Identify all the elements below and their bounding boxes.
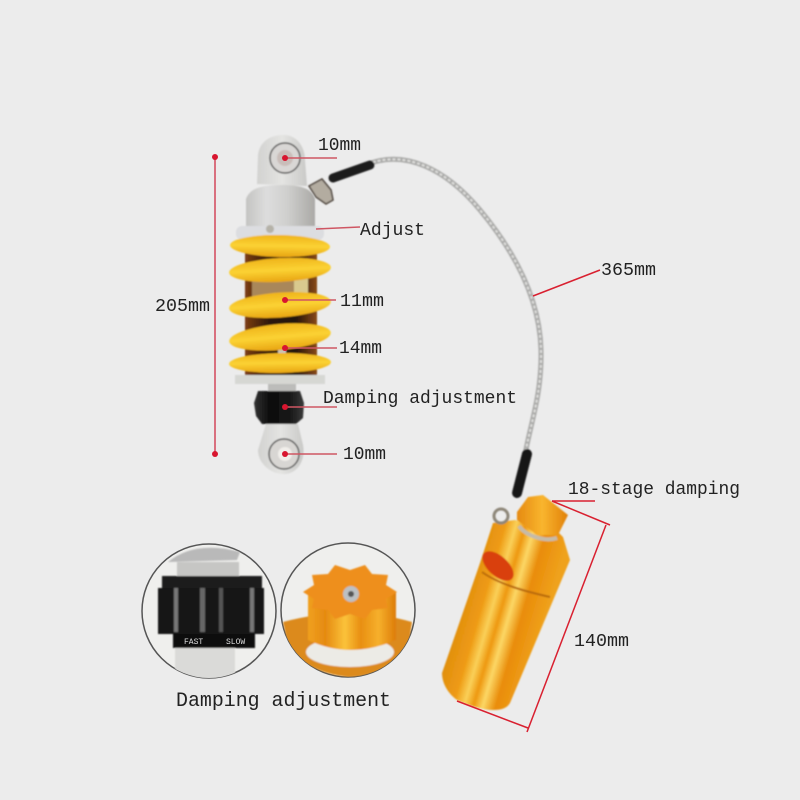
spring coils [228,234,332,374]
labels: 10mm [343,445,386,465]
reservoir hose [309,159,541,493]
canister ring [494,509,508,523]
bottom eye [269,439,299,469]
black damping knob [254,391,304,424]
hose lower sleeve [517,454,527,493]
top mount [257,135,307,186]
knob detail: gold adjuster cap [281,543,415,677]
shock absorber [228,135,332,474]
neck ring [519,526,557,539]
knob detail: black damping adjuster: SLOW [226,638,245,647]
labels: 11mm [340,292,384,312]
labels: 205mm [155,297,210,317]
labels: 14mm [339,339,382,359]
leader dots [282,155,288,457]
labels: 140mm [574,632,629,652]
inner shaft [245,250,317,375]
canister groove [482,572,550,597]
labels: 10mm [318,136,361,156]
labels [155,136,740,713]
dimension line: overall height [212,154,218,457]
knob detail: black damping adjuster [142,544,276,680]
labels: 18-stage damping [568,480,740,500]
canister cap [517,495,568,535]
labels: 365mm [601,261,656,281]
knob scale text: FAST [184,638,203,647]
hose fitting [309,179,333,204]
spring seat [235,375,325,384]
hose upper sleeve [333,165,370,178]
labels: Damping adjustment [176,690,391,713]
spring collar [236,226,324,240]
reservoir canister [442,495,570,710]
silver body [246,185,315,232]
canister body [442,520,570,710]
labels: Damping adjustment [323,389,517,409]
labels: Adjust [360,221,425,241]
canister shoulder shadow [477,546,519,586]
top eye [270,143,300,173]
lower mount [258,424,304,474]
leader lines [285,158,610,732]
lower rod [268,384,296,392]
